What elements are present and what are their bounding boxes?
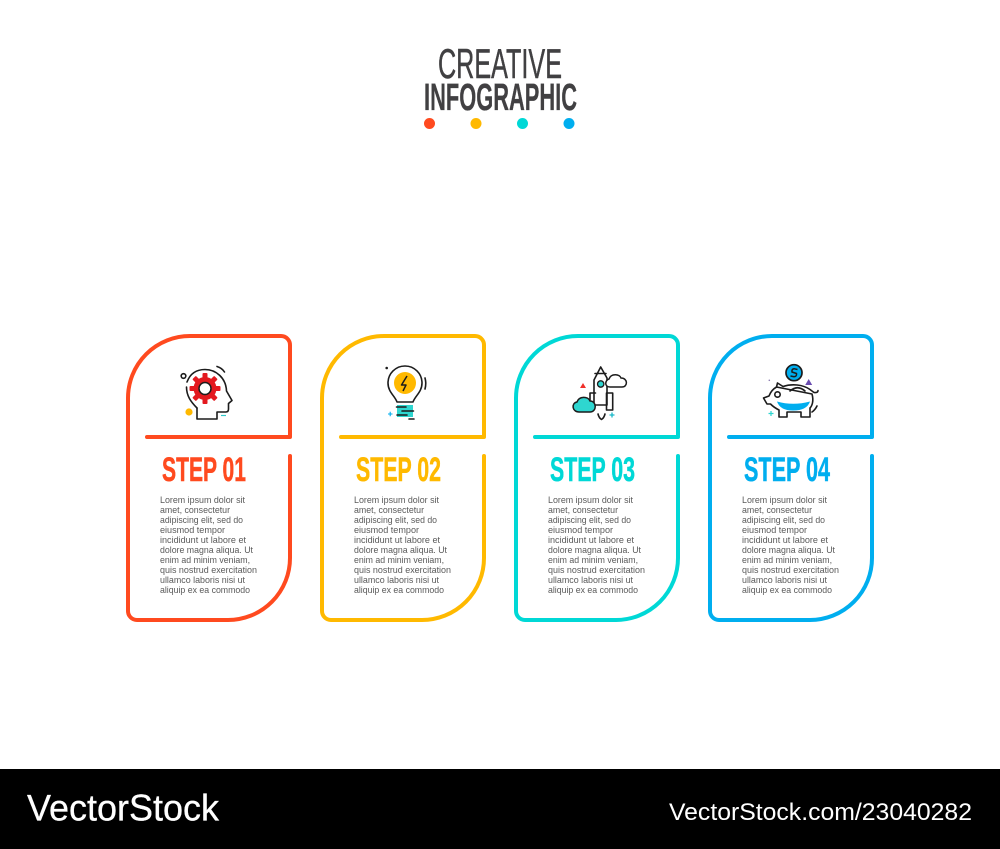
text block: enim ad minim veniam, <box>354 554 444 565</box>
heading: STEP 03 <box>550 451 635 489</box>
panel: step 01 <box>128 336 290 620</box>
title colour dots <box>424 118 574 129</box>
icon: light bulb <box>385 366 426 419</box>
text block: enim ad minim veniam, <box>160 554 250 565</box>
text block: quis nostrud exercitation <box>548 564 645 575</box>
text block: adipiscing elit, sed do <box>160 514 243 525</box>
text block: Lorem ipsum dolor sit <box>160 494 245 505</box>
heading: STEP 04 <box>744 451 830 489</box>
text block: dolore magna aliqua. Ut <box>160 544 253 555</box>
text block: quis nostrud exercitation <box>742 564 839 575</box>
text block: aliquip ex ea commodo <box>160 584 250 595</box>
icon: rocket and clouds <box>573 367 626 420</box>
text block: amet, consectetur <box>548 504 618 515</box>
text block: amet, consectetur <box>354 504 424 515</box>
text block: adipiscing elit, sed do <box>354 514 437 525</box>
panel: step 03 <box>516 336 678 620</box>
text block: enim ad minim veniam, <box>742 554 832 565</box>
text block: amet, consectetur <box>742 504 812 515</box>
title <box>424 40 577 119</box>
text block: Lorem ipsum dolor sit <box>742 494 827 505</box>
footer url: VectorStock.com/23040282 <box>669 799 972 826</box>
text block <box>548 494 645 595</box>
text block: amet, consectetur <box>160 504 230 515</box>
title: INFOGRAPHIC <box>424 77 577 119</box>
text block: Lorem ipsum dolor sit <box>548 494 633 505</box>
text block: eiusmod tempor <box>354 524 419 535</box>
text block: adipiscing elit, sed do <box>548 514 631 525</box>
text block: eiusmod tempor <box>160 524 225 535</box>
text block: dolore magna aliqua. Ut <box>742 544 835 555</box>
text block <box>354 494 451 595</box>
text block: dolore magna aliqua. Ut <box>354 544 447 555</box>
text block: aliquip ex ea commodo <box>548 584 638 595</box>
icon: head with gear <box>181 366 232 419</box>
text block: ullamco laboris nisi ut <box>160 574 245 585</box>
text block: ullamco laboris nisi ut <box>354 574 439 585</box>
text block <box>160 494 257 595</box>
text block: incididunt ut labore et <box>548 534 634 545</box>
panel: step 04 <box>710 336 872 620</box>
footer logo: VectorStock <box>27 788 219 828</box>
text block <box>742 494 839 595</box>
icon: piggy bank with coin <box>764 365 818 417</box>
text block: adipiscing elit, sed do <box>742 514 825 525</box>
footer bar <box>0 769 1000 849</box>
text block: eiusmod tempor <box>742 524 807 535</box>
text block: quis nostrud exercitation <box>160 564 257 575</box>
panel: step 02 <box>322 336 484 620</box>
text block: ullamco laboris nisi ut <box>742 574 827 585</box>
text block: dolore magna aliqua. Ut <box>548 544 641 555</box>
text block: aliquip ex ea commodo <box>354 584 444 595</box>
text block: enim ad minim veniam, <box>548 554 638 565</box>
text block: ullamco laboris nisi ut <box>548 574 633 585</box>
text block: quis nostrud exercitation <box>354 564 451 575</box>
text block: incididunt ut labore et <box>354 534 440 545</box>
text block: eiusmod tempor <box>548 524 613 535</box>
text block: incididunt ut labore et <box>742 534 828 545</box>
text block: incididunt ut labore et <box>160 534 246 545</box>
text block: Lorem ipsum dolor sit <box>354 494 439 505</box>
text block: aliquip ex ea commodo <box>742 584 832 595</box>
title: CREATIVE <box>438 40 562 87</box>
heading: STEP 02 <box>356 451 441 489</box>
heading: STEP 01 <box>162 451 246 489</box>
